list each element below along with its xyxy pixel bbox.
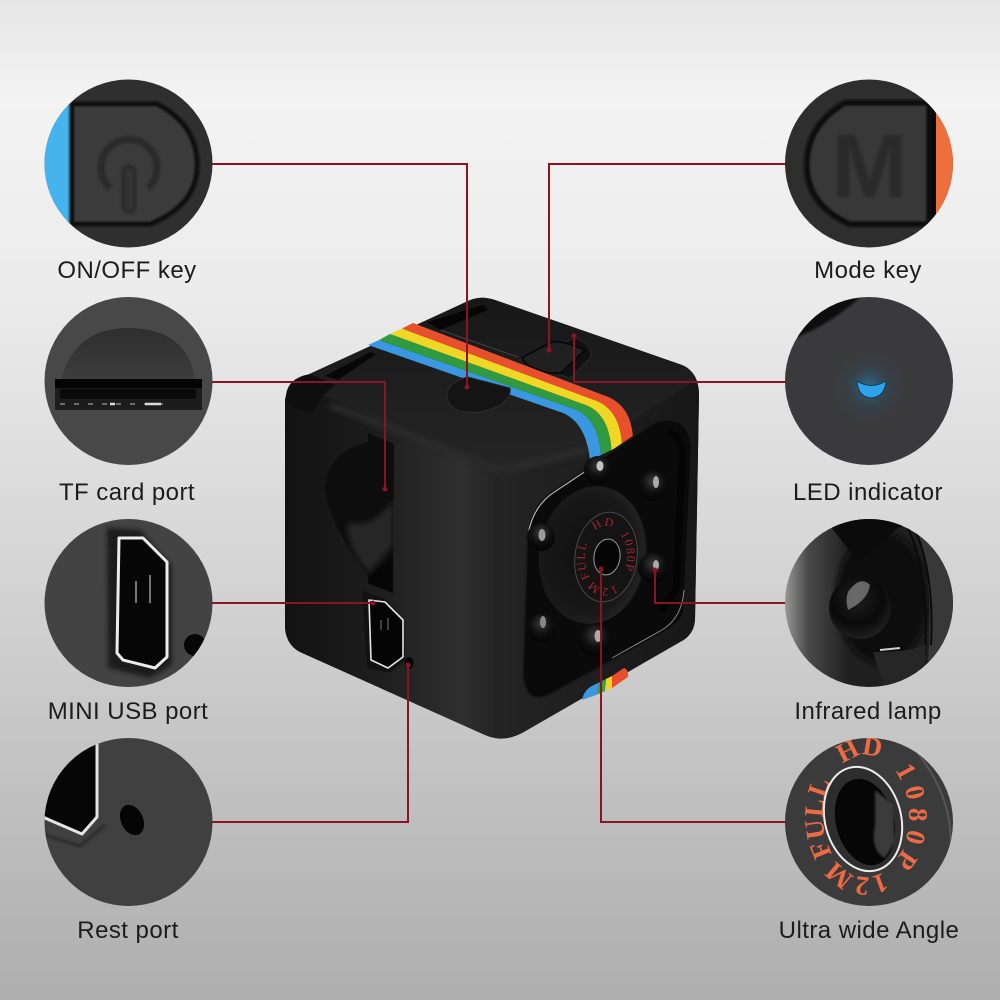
LED crescent xyxy=(857,381,886,398)
lamp 5 xyxy=(527,614,555,642)
leader lines xyxy=(212,164,786,822)
lamp ball xyxy=(829,586,891,639)
panel: TF card port xyxy=(44,297,214,506)
key shape xyxy=(807,103,929,224)
mode button xyxy=(523,342,585,373)
TF label: TF card port xyxy=(59,479,195,506)
LED photo xyxy=(780,297,954,467)
rainbow band xyxy=(368,323,633,460)
Mode label: Mode key xyxy=(814,257,922,284)
left face xyxy=(285,384,500,738)
lamp 1 xyxy=(584,456,612,484)
Infrared photo xyxy=(784,519,960,690)
port shadow xyxy=(107,528,172,678)
inner glass xyxy=(874,790,895,858)
key shape xyxy=(72,104,197,224)
right face xyxy=(497,380,699,739)
Mode photo xyxy=(784,79,957,249)
reset hole xyxy=(404,657,414,669)
top slot line xyxy=(440,330,518,357)
lamp 2 xyxy=(638,471,668,501)
white ring xyxy=(813,758,913,880)
TF photo xyxy=(44,297,214,467)
lens housing xyxy=(530,479,656,631)
port corner xyxy=(44,744,97,832)
TF recess highlight xyxy=(348,500,393,573)
lens label: Ultra wide Angle xyxy=(779,917,959,944)
USB label: MINI USB port xyxy=(48,698,208,725)
dome xyxy=(62,328,195,379)
infrared lamps xyxy=(527,456,668,656)
line: USB xyxy=(212,602,373,604)
dark corner xyxy=(796,298,860,338)
glow xyxy=(844,362,894,412)
top rear slot xyxy=(427,305,488,330)
line: TF card xyxy=(212,382,385,489)
line: reset xyxy=(212,665,408,822)
line: ON/OFF xyxy=(212,164,467,387)
side top slot xyxy=(325,352,376,380)
window highlight top xyxy=(528,467,592,535)
card slot xyxy=(55,379,202,388)
lens rim edge xyxy=(915,750,951,880)
camera xyxy=(285,298,699,739)
line: mode xyxy=(549,164,786,350)
green stripe xyxy=(379,334,612,455)
blue stripe xyxy=(368,340,601,460)
lamp 6 xyxy=(579,624,611,656)
ON/OFF photo xyxy=(40,79,214,249)
panel: ON/OFF key xyxy=(40,79,214,284)
panel: Rest port xyxy=(44,738,212,943)
inner window frame xyxy=(660,432,682,612)
panel: Ultra wide Angle xyxy=(779,738,959,944)
panel: LED indicator xyxy=(780,297,954,506)
upper black wedge xyxy=(832,519,902,552)
bottom mini stripes xyxy=(582,668,628,700)
reset hole xyxy=(120,804,144,836)
right strip xyxy=(918,535,953,663)
lamp 3 xyxy=(527,523,555,551)
Rest photo xyxy=(44,738,212,906)
port shadow xyxy=(45,825,105,846)
lens window xyxy=(523,420,692,698)
lower shell xyxy=(873,645,926,690)
red stripe xyxy=(402,323,633,445)
neighbouring hole xyxy=(184,634,206,656)
line: LED xyxy=(574,336,786,382)
power button xyxy=(447,377,510,413)
Rest label: Rest port xyxy=(77,917,179,944)
top face xyxy=(298,298,696,476)
contacts xyxy=(60,403,170,405)
Infrared label: Infrared lamp xyxy=(794,698,942,725)
camera body xyxy=(285,298,699,739)
lens interior xyxy=(826,772,904,872)
window highlight bottom xyxy=(612,590,684,658)
TF recess xyxy=(325,433,394,593)
TF recess lower notch xyxy=(368,557,393,593)
pins xyxy=(136,575,150,603)
lamp highlight xyxy=(846,581,870,610)
yellow stripe xyxy=(390,328,622,450)
ON/OFF label: ON/OFF key xyxy=(57,257,197,284)
lamp housing xyxy=(836,532,928,664)
LED label: LED indicator xyxy=(793,479,943,506)
lens photo xyxy=(785,738,953,906)
line end dots xyxy=(370,334,658,668)
top right recess xyxy=(520,338,590,378)
line: lens xyxy=(601,569,786,822)
USB port xyxy=(362,590,405,673)
line: infrared xyxy=(655,570,786,603)
power icon xyxy=(101,139,157,212)
USB photo xyxy=(44,519,214,689)
strip grooves xyxy=(905,522,932,655)
lower rim glint xyxy=(880,648,900,650)
ring text: FULLHD1080P12M xyxy=(804,738,927,895)
mounting tab xyxy=(286,374,335,411)
front corner glow xyxy=(330,405,590,469)
lens plate text: FULLHD 1080P 12M xyxy=(577,518,635,596)
panel: Mode key xyxy=(784,79,957,284)
lens plate xyxy=(574,512,638,602)
M letter: M xyxy=(832,117,908,217)
panel: MINI USB port xyxy=(44,519,214,725)
panel: Infrared lamp xyxy=(784,519,960,725)
lens glass xyxy=(592,537,622,577)
lamp 4 xyxy=(638,553,668,583)
port xyxy=(117,538,167,668)
